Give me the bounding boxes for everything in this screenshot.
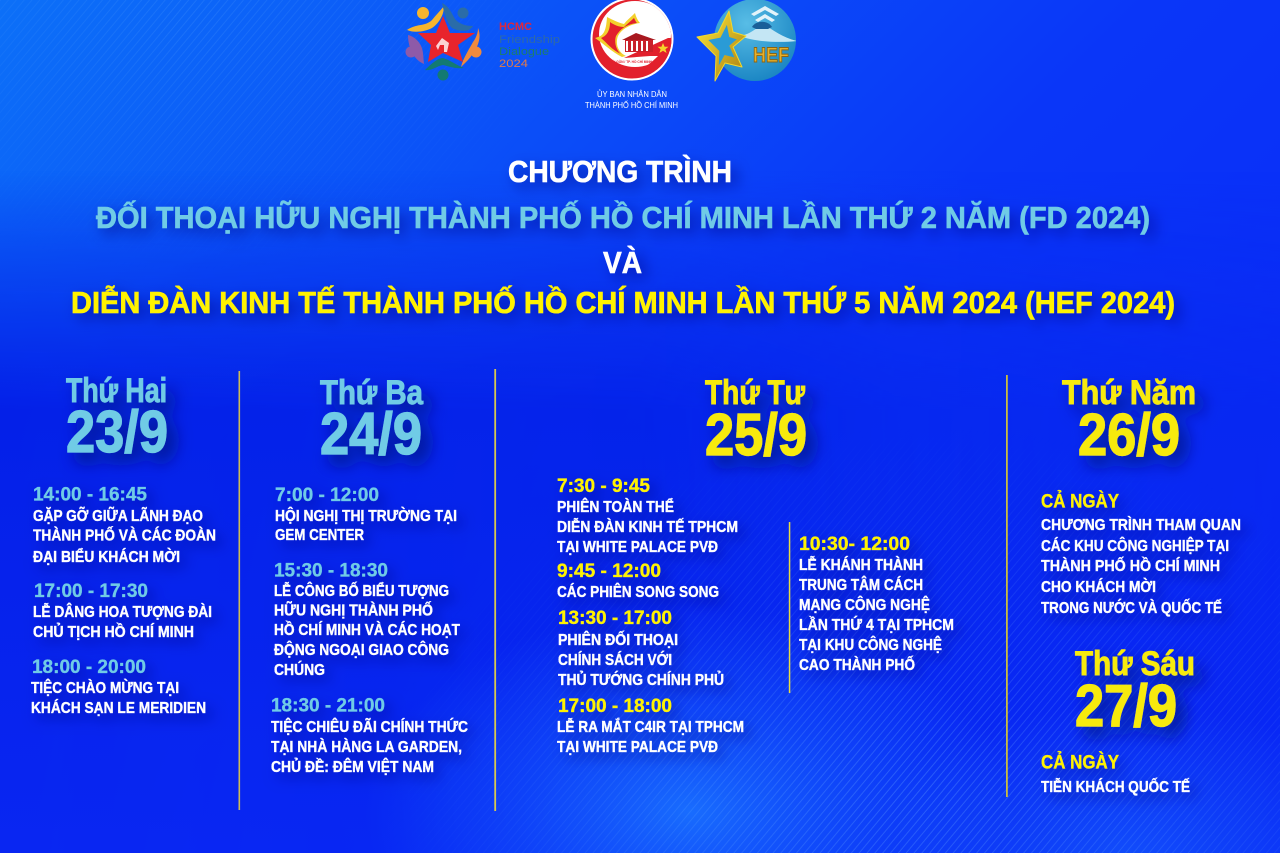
event: all day tour: CHO KHÁCH MỜI — [1041, 577, 1156, 596]
event: 15:30: 15:30 - 18:30 — [274, 560, 388, 582]
event: all day tour — [1041, 490, 1241, 617]
event: all day tour: CHƯƠNG TRÌNH THAM QUAN — [1041, 515, 1241, 534]
event: 17:00: LỄ RA MẮT C4IR TẠI TPHCM — [557, 717, 744, 736]
day heading: Wednesday — [705, 374, 807, 468]
event: 10:30 — [799, 534, 954, 674]
day heading: Friday: 27/9 — [1075, 673, 1177, 739]
event: 7:30 — [557, 476, 738, 556]
event: 14:00: GẶP GỠ GIỮA LÃNH ĐẠO — [33, 505, 203, 525]
event: 15:30: ĐỘNG NGOẠI GIAO CÔNG — [274, 640, 449, 659]
event: 18:30: TIỆC CHIÊU ĐÃI CHÍNH THỨC — [271, 716, 468, 736]
event: all day tour: CẢ NGÀY — [1041, 490, 1119, 512]
event: 14:00: THÀNH PHỐ VÀ CÁC ĐOÀN — [33, 524, 216, 544]
event: 10:30: MẠNG CÔNG NGHỆ — [799, 595, 930, 614]
logo: HCMC Friendship Dialogue 2024 — [406, 3, 560, 80]
event: all day tour: CÁC KHU CÔNG NGHIỆP TẠI — [1041, 536, 1229, 555]
event: 17:00: 17:00 - 17:30 — [34, 581, 148, 602]
event: 18:30 — [271, 696, 468, 776]
icon: friendship star — [406, 3, 482, 80]
event: 15:30: LỄ CÔNG BỐ BIỂU TƯỢNG — [274, 580, 449, 600]
event: 9:45: CÁC PHIÊN SONG SONG — [557, 582, 719, 601]
day heading: Wednesday: Thứ Tư — [705, 374, 805, 412]
event: 17:00: LỄ DÂNG HOA TƯỢNG ĐÀI — [33, 602, 212, 621]
event: 7:30: DIỄN ĐÀN KINH TẾ TPHCM — [557, 517, 738, 536]
event: 7:00: GEM CENTER — [275, 527, 364, 544]
event: 18:30: 18:30 - 21:00 — [271, 696, 385, 716]
title line: FD 2024: ĐỐI THOẠI HỮU NGHỊ THÀNH PHỐ HỒ CHÍ MINH LẦN THỨ 2 NĂM (FD 2024) — [96, 199, 1150, 235]
day heading: Tuesday — [320, 374, 424, 467]
event: 7:30: 7:30 - 9:45 — [557, 476, 650, 497]
event: 14:00: 14:00 - 16:45 — [33, 484, 147, 506]
event: all day farewell — [1041, 752, 1190, 796]
day heading: Friday: Thứ Sáu — [1075, 645, 1195, 683]
event: 10:30: TRUNG TÂM CÁCH — [799, 575, 923, 594]
event: 14:00: ĐẠI BIỂU KHÁCH MỜI — [33, 547, 180, 566]
event: 18:00: TIỆC CHÀO MỪNG TẠI — [31, 678, 179, 697]
event: 13:30: THỦ TƯỚNG CHÍNH PHỦ — [558, 670, 724, 689]
event: 7:00: 7:00 - 12:00 — [275, 485, 379, 506]
event: 15:30: HỮU NGHỊ THÀNH PHỐ — [274, 600, 433, 620]
panel: Thursday 26/9 — [1041, 374, 1241, 617]
event: 9:45: 9:45 - 12:00 — [557, 561, 661, 582]
logo wordmark: HCMC — [499, 21, 532, 33]
day heading: Monday: 23/9 — [66, 399, 168, 465]
logo wordmark: Dialogue — [499, 46, 549, 58]
logo: Ho Chi Minh City People's Committee: SÀI GÒN / TP. HỒ CHÍ MINH — [610, 59, 652, 64]
logos row — [406, 0, 797, 110]
event: 13:30: CHÍNH SÁCH VỚI — [558, 650, 672, 669]
event: 10:30: TẠI KHU CÔNG NGHỆ — [799, 635, 942, 654]
title block — [71, 154, 1175, 320]
day heading: Tuesday: Thứ Ba — [320, 374, 424, 412]
event: all day tour: TRONG NƯỚC VÀ QUỐC TẾ — [1041, 597, 1222, 617]
event: 18:00: KHÁCH SẠN LE MERIDIEN — [31, 698, 206, 717]
day heading: Thursday: Thứ Năm — [1062, 374, 1196, 412]
event: 15:30 — [274, 560, 460, 679]
logo caption — [585, 88, 678, 110]
event: 13:30: 13:30 - 17:00 — [558, 608, 672, 629]
event: 15:30: HỒ CHÍ MINH VÀ CÁC HOẠT — [274, 620, 460, 639]
day heading: Monday: Thứ Hai — [66, 372, 167, 410]
day heading: Friday — [1075, 645, 1195, 739]
event: 13:30: PHIÊN ĐỐI THOẠI — [558, 629, 678, 649]
event: 10:30: LỄ KHÁNH THÀNH — [799, 555, 923, 574]
logo caption: ỦY BAN NHÂN DÂN — [597, 88, 667, 99]
title line: program: CHƯƠNG TRÌNH — [508, 154, 732, 189]
event: all day farewell: CẢ NGÀY — [1041, 752, 1119, 774]
event: 17:00: 17:00 - 18:00 — [558, 696, 672, 717]
panel: Wednesday 25/9 — [557, 374, 954, 756]
day heading: Tuesday: 24/9 — [320, 401, 422, 467]
logo: Ho Chi Minh City People's Committee — [590, 0, 674, 80]
event: all day tour: THÀNH PHỐ HỒ CHÍ MINH — [1041, 555, 1220, 575]
event: 18:30: TẠI NHÀ HÀNG LA GARDEN, — [271, 737, 462, 756]
day heading: Thursday: 26/9 — [1078, 402, 1180, 468]
title line: HEF 2024: DIỄN ĐÀN KINH TẾ THÀNH PHỐ HỒ CHÍ MINH LẦN THỨ 5 NĂM 2024 (HEF 2024) — [71, 284, 1175, 320]
panel: Tuesday 24/9 — [271, 374, 468, 776]
day heading: Wednesday: 25/9 — [705, 402, 807, 468]
day heading: Monday — [66, 372, 168, 465]
logo: HEF: HEF — [753, 44, 789, 67]
panel: Monday 23/9 — [31, 372, 216, 717]
title line: and: VÀ — [603, 245, 642, 280]
event: 18:00 — [31, 657, 206, 717]
event: 9:45 — [557, 561, 719, 601]
logo wordmark: Friendship — [499, 34, 560, 46]
event: 7:00 — [275, 485, 457, 544]
event: 17:00: CHỦ TỊCH HỒ CHÍ MINH — [33, 622, 194, 641]
event: all day farewell: TIỄN KHÁCH QUỐC TẾ — [1041, 776, 1190, 796]
event: 7:30: TẠI WHITE PALACE PVĐ — [557, 539, 718, 556]
event: 17:00 — [33, 581, 212, 641]
event: 14:00 — [33, 484, 216, 566]
event: 7:30: PHIÊN TOÀN THỂ — [557, 497, 674, 516]
logo: HEF — [697, 0, 797, 81]
event: 17:00: TẠI WHITE PALACE PVĐ — [557, 739, 718, 756]
day heading: Thursday — [1062, 374, 1196, 468]
event: 7:00: HỘI NGHỊ THỊ TRƯỜNG TẠI — [275, 506, 457, 525]
event: 10:30: CAO THÀNH PHỐ — [799, 654, 915, 674]
event: 18:00: 18:00 - 20:00 — [32, 657, 146, 678]
event: 10:30: LẦN THỨ 4 TẠI TPHCM — [799, 615, 954, 634]
event: 17:00 — [557, 696, 744, 756]
event: 13:30 — [558, 608, 724, 689]
event: 15:30: CHÚNG — [274, 660, 325, 679]
logo wordmark — [499, 21, 560, 70]
logo wordmark: 2024 — [499, 58, 528, 70]
event: 10:30: 10:30- 12:00 — [799, 534, 910, 555]
event: 18:30: CHỦ ĐỀ: ĐÊM VIỆT NAM — [271, 757, 434, 776]
panel: Friday 27/9 — [1041, 645, 1195, 796]
logo caption: THÀNH PHỐ HỒ CHÍ MINH — [585, 99, 678, 110]
